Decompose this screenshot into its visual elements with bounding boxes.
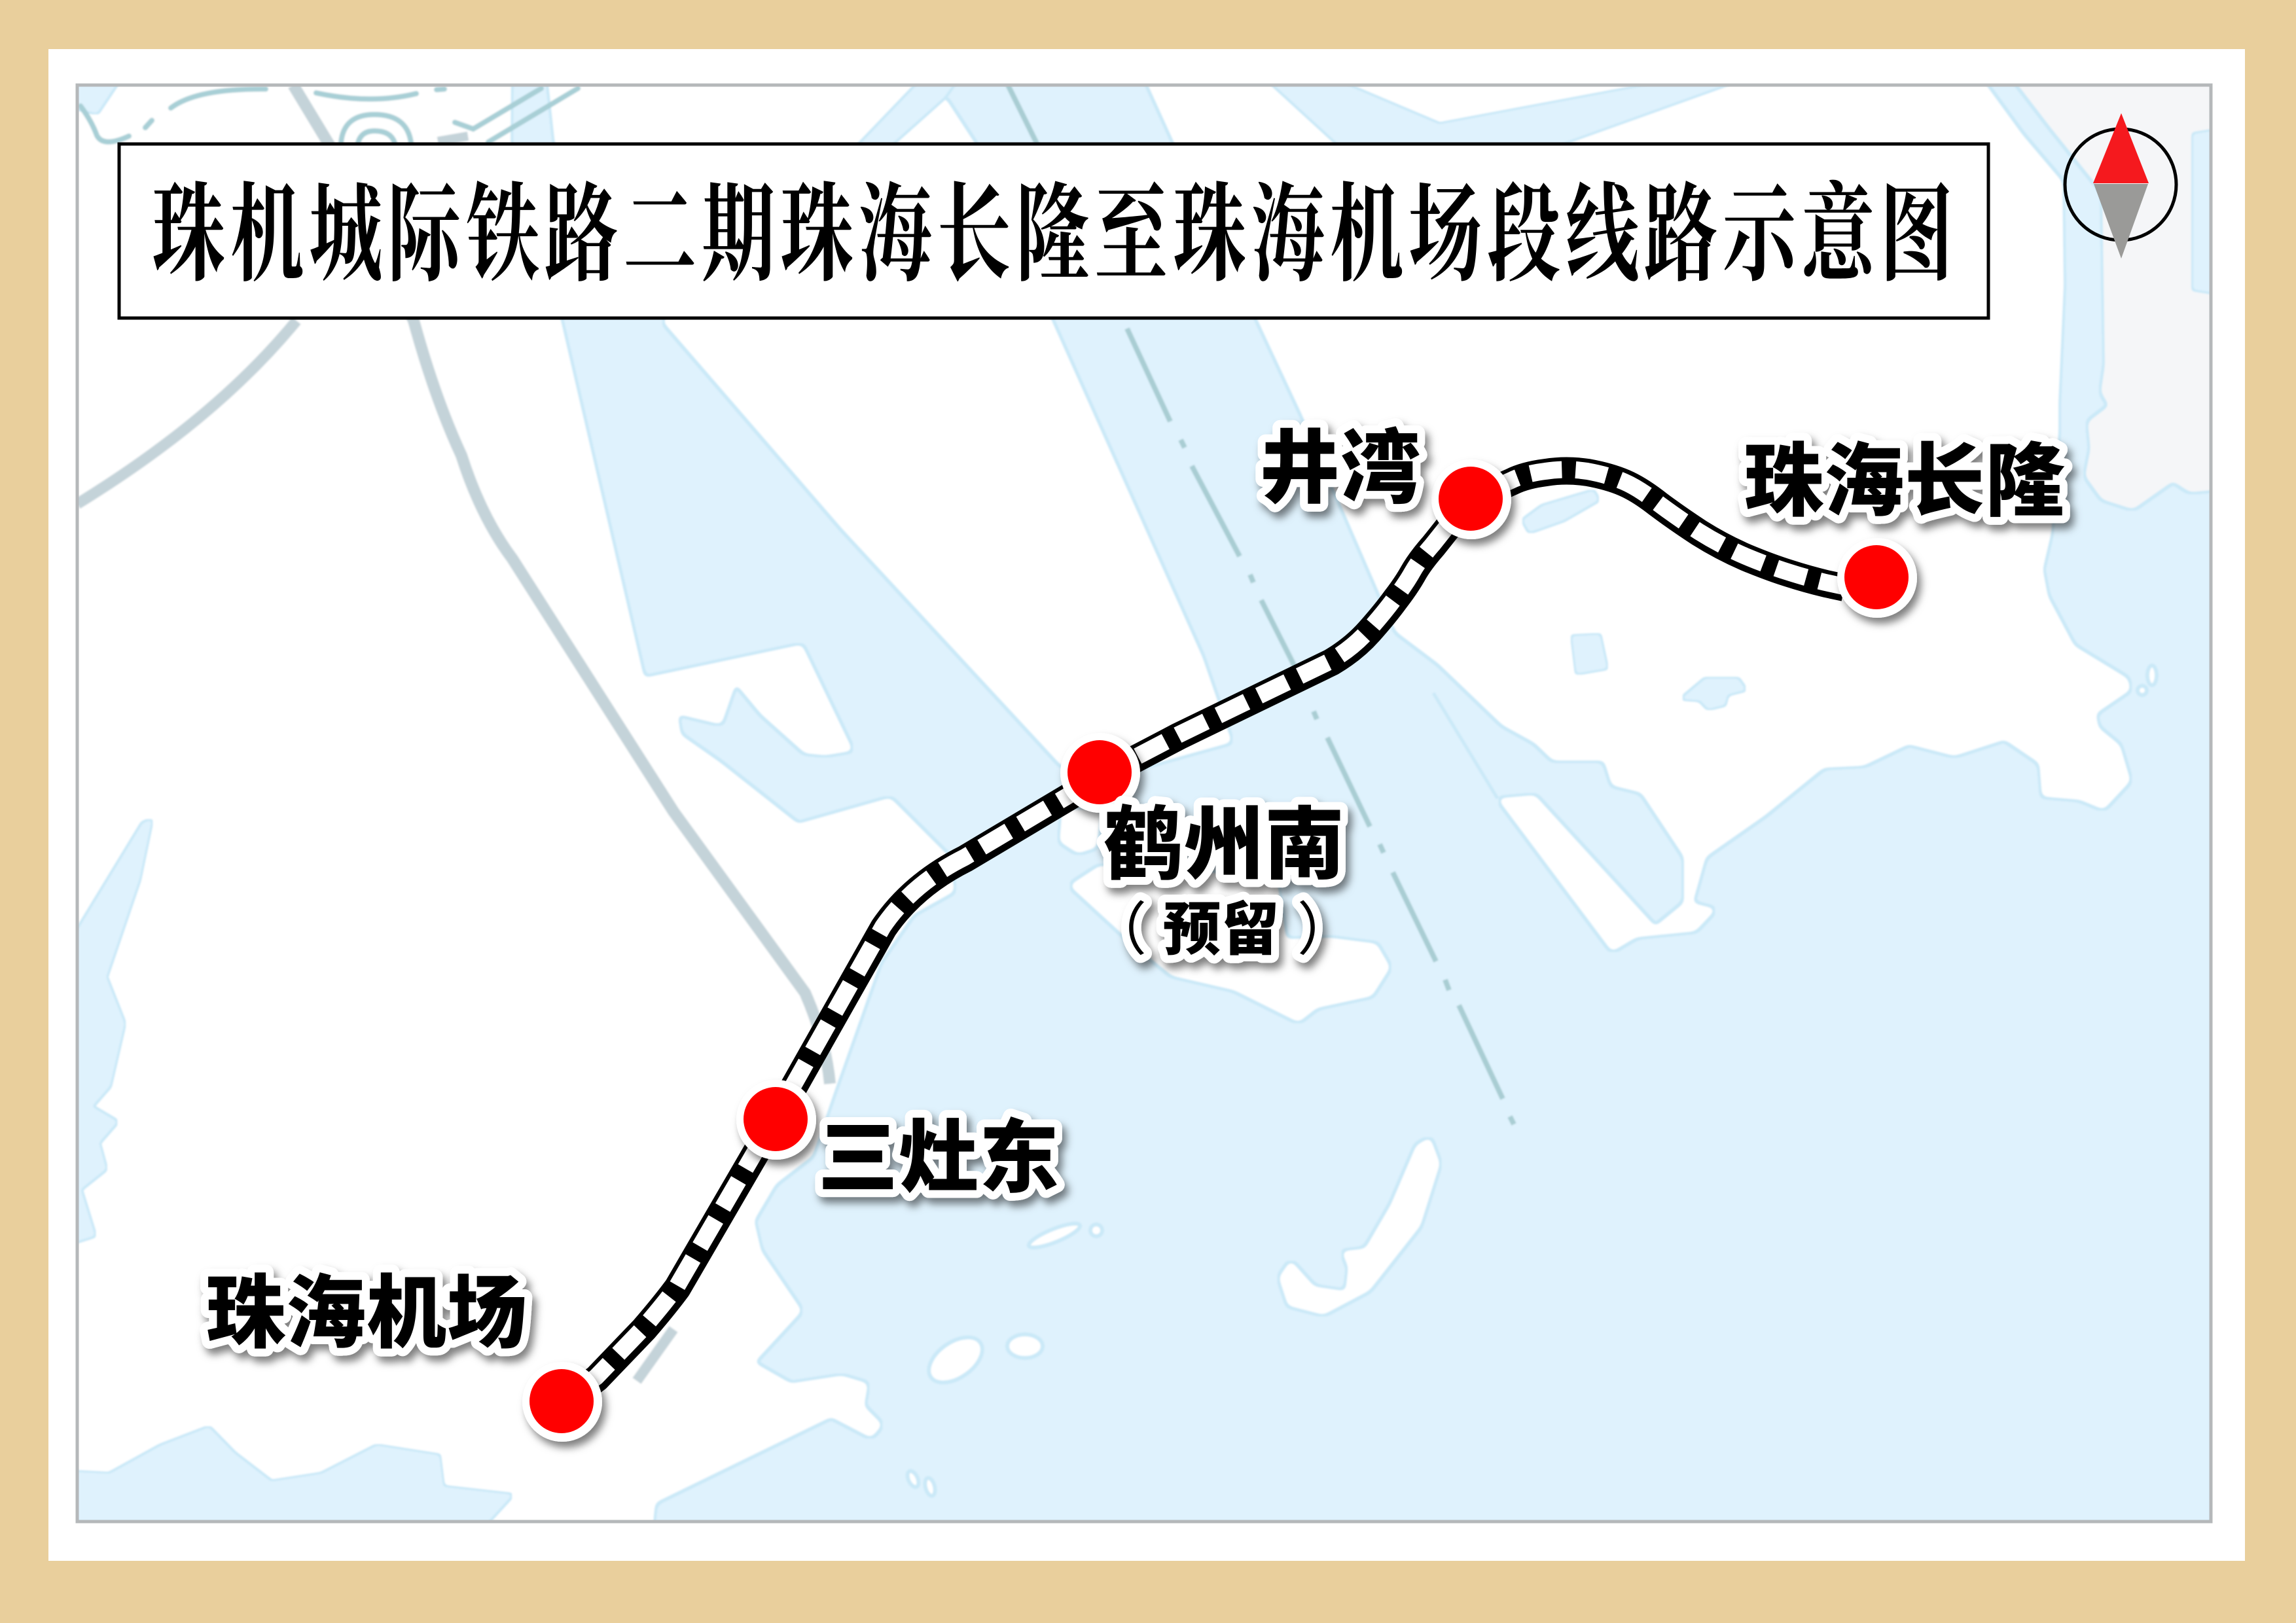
dash-dot centre line [1008,85,1514,1124]
label: 珠海长隆: 珠海长隆 [1744,437,2066,526]
title [119,144,1988,318]
railway route [575,470,1844,1394]
station: 三灶东 [736,1080,816,1160]
teal minor roads [81,88,578,143]
label: 三灶东: 三灶东 [818,1114,1060,1203]
station: 珠海机场 [522,1362,602,1442]
title: 珠机城际铁路二期珠海长隆至珠海机场段线路示意图 [152,177,1958,295]
label: 珠海机场: 珠海机场 [206,1269,528,1358]
north land between channels [546,86,912,143]
blob under station [1060,810,1101,853]
thin water sliver [1433,693,1498,798]
label: 预留: 预留 [1163,897,1280,962]
north-east land [2008,72,2225,509]
station: 井湾 [1431,459,1511,539]
left water strip [62,819,152,1246]
west land [62,72,954,1535]
station markers [522,459,1917,1442]
central land wedge [662,97,1232,779]
water band top centre [851,72,962,154]
ponds [1572,635,1607,673]
water band north [1260,72,1761,196]
station: 珠海长隆 [1837,538,1917,618]
grey roads [77,85,830,1381]
label: 鹤州南: 鹤州南 [1103,800,1345,889]
label: 预留: （ [1089,897,1147,962]
hook island [1279,1137,1440,1315]
icon: compass [2065,113,2176,259]
label: 井湾: 井湾 [1260,424,1421,513]
station: 鹤州南 [1060,733,1140,813]
bottom-left water [62,1427,512,1535]
label: 预留: ） [1297,897,1355,962]
small islands [905,666,2157,1497]
east land [1142,72,2130,952]
corner water [62,72,124,113]
island near 鹤州南 [1069,866,1390,1022]
